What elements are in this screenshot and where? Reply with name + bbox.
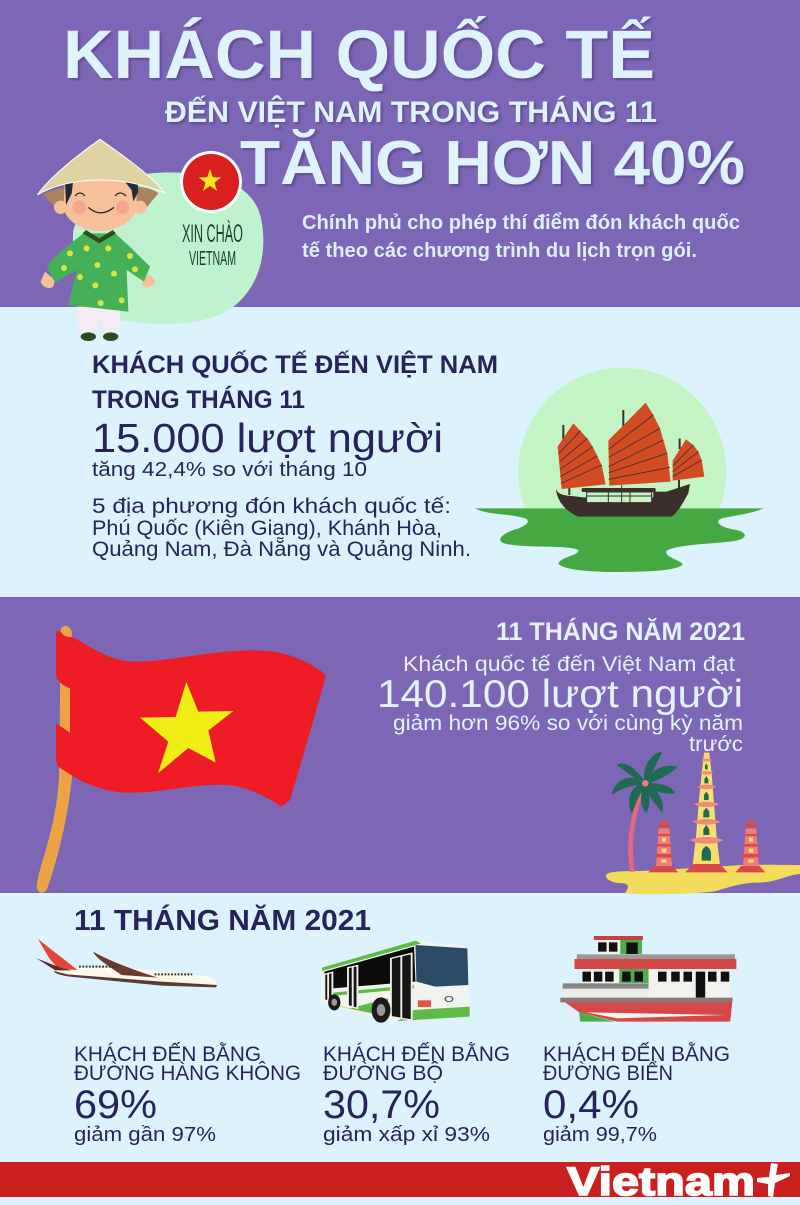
greeting text: VIETNAM [189,248,236,270]
intro text [302,212,740,262]
number: 15.000 lượt người [92,415,443,461]
character: boy in conical hat [37,139,164,341]
destinations: Quảng Nam, Đà Nẵng và Quảng Ninh. [92,538,471,561]
destinations [92,495,471,561]
destinations: 5 địa phương đón khách quốc tế: [92,495,451,518]
column: sea: ĐƯỜNG BIỂN [543,1060,673,1085]
robe [47,233,150,312]
panel: eleven months [0,597,800,894]
panel: header [0,0,800,324]
column: sea: 0,4% [543,1083,639,1127]
column: road: ĐƯỜNG BỘ [323,1060,443,1085]
column: air: 69% [74,1083,157,1127]
logo [567,1160,790,1204]
icon: junk boat [475,368,764,572]
column: road: KHÁCH ĐẾN BẰNG [323,1041,510,1066]
logo: Vietnam [567,1160,755,1204]
change: tăng 42,4% so với tháng 10 [92,458,367,481]
number: 140.100 lượt người [377,673,743,716]
panel: transport [37,903,736,1146]
heading: TRONG THÁNG 11 [92,385,305,414]
intro text: Chính phủ cho phép thí điểm đón khách quốc [302,212,740,234]
column: air: KHÁCH ĐẾN BẰNG [74,1041,261,1066]
icon: waving flag [37,626,326,893]
heading: 11 THÁNG NĂM 2021 [496,617,745,646]
greeting text [182,219,243,270]
column: road: giảm xấp xỉ 93% [323,1123,490,1146]
footer bar [0,1160,800,1204]
title: main: KHÁCH QUỐC TẾ [63,16,655,93]
icon: round flag [180,151,242,213]
column: air [74,1041,301,1146]
hat [37,139,164,195]
icon: ferry [560,936,736,1022]
destinations: Phú Quốc (Kiên Giang), Khánh Hòa, [92,517,442,540]
column: road [323,1041,510,1146]
panel: november [92,349,764,572]
description: Khách quốc tế đến Việt Nam đạt [403,653,735,676]
column: road: 30,7% [323,1083,440,1127]
hat underside [43,185,158,209]
heading: KHÁCH QUỐC TẾ ĐẾN VIỆT NAM [92,349,498,379]
change [393,712,743,756]
title: increase: TĂNG HƠN 40% [240,129,745,198]
icon: bus [322,941,471,1023]
heading: 11 THÁNG NĂM 2021 [74,903,371,937]
column: air: ĐƯỜNG HÀNG KHÔNG [74,1060,301,1085]
greeting text: XIN CHÀO [182,219,243,248]
icon: airplane [37,939,217,987]
column: sea: KHÁCH ĐẾN BẰNG [543,1041,730,1066]
icon: pagoda island [606,753,800,894]
hands [41,272,55,288]
title: subtitle: ĐẾN VIỆT NAM TRONG THÁNG 11 [165,95,657,129]
heading [92,349,498,414]
legs [77,307,120,332]
column: sea [543,1041,730,1146]
change: trước [689,733,743,756]
mint blob [73,172,263,324]
change: giảm hơn 96% so với cùng kỳ năm [393,712,743,735]
column: sea: giảm 99,7% [543,1123,657,1146]
column: air: giảm gần 97% [74,1123,216,1146]
intro text: tế theo các chương trình du lịch trọn gói. [302,240,697,262]
head [63,177,137,231]
